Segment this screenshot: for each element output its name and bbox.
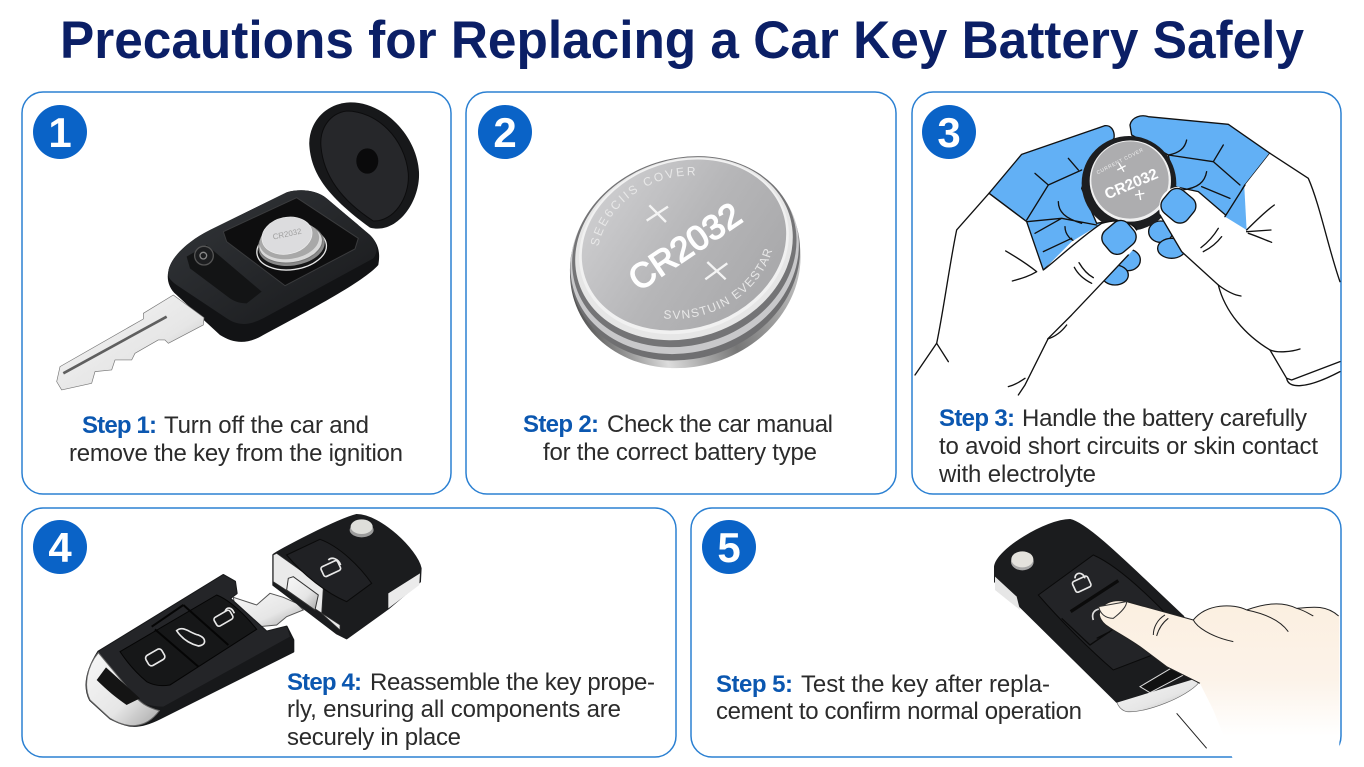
step 1 text bbox=[69, 412, 403, 467]
icon: CR2032 coin battery bbox=[570, 156, 801, 368]
step 5 text: cement to confirm normal operation bbox=[716, 698, 1082, 725]
step 1 number badge: 1 bbox=[48, 109, 72, 156]
step 5 text bbox=[716, 671, 1082, 725]
icon: CR2032 coin battery: SVNSTUIN EVESTAR bbox=[664, 249, 772, 319]
step 1 text: Turn off the car and bbox=[164, 412, 369, 439]
step 2 text: for the correct battery type bbox=[543, 439, 817, 466]
step 4 number badge bbox=[33, 520, 87, 574]
step 2 text: Check the car manual bbox=[607, 411, 833, 438]
step 3 number badge bbox=[922, 105, 976, 159]
step 5 text: Step 5: bbox=[716, 671, 793, 698]
step 3 text bbox=[938, 405, 1318, 488]
step 4 text bbox=[287, 669, 655, 751]
panel: step 3 bbox=[912, 92, 1341, 494]
icon: two gloved hands holding battery: CR2032 bbox=[1102, 166, 1161, 203]
step 4 text: rly, ensuring all components are bbox=[287, 696, 621, 723]
title: Precautions for Replacing a Car Key Battery Safely bbox=[60, 11, 1304, 70]
step 1 number badge bbox=[33, 105, 87, 159]
step 3 text: with electrolyte bbox=[938, 461, 1096, 488]
step 2 text bbox=[523, 411, 833, 466]
icon: two gloved hands holding battery bbox=[915, 116, 1340, 395]
step 3 text: Step 3: bbox=[939, 405, 1015, 432]
icon: two gloved hands holding battery: CURRENT COVER bbox=[1096, 147, 1145, 176]
icon: CR2032 coin battery: SEE6CIIS COVER bbox=[591, 167, 695, 246]
step 4 text: Step 4: bbox=[287, 669, 362, 696]
step 3 text: Handle the battery carefully bbox=[1022, 405, 1307, 432]
icon: CR2032 coin battery: CR2032 bbox=[622, 196, 749, 299]
step 1 text: Step 1: bbox=[82, 412, 157, 439]
step 2 number badge bbox=[478, 105, 532, 159]
icon: flip key being reassembled bbox=[87, 515, 421, 726]
panel: step 1 bbox=[22, 92, 451, 494]
panel: step 5 bbox=[691, 508, 1341, 760]
step 2 number badge: 2 bbox=[493, 109, 517, 156]
step 5 number badge: 5 bbox=[717, 524, 741, 571]
step 1 text: remove the key from the ignition bbox=[69, 440, 403, 467]
step 4 text: securely in place bbox=[287, 724, 461, 751]
icon: car key with open battery cover bbox=[57, 102, 419, 390]
step 3 text: to avoid short circuits or skin contact bbox=[939, 433, 1318, 460]
step 5 text: Test the key after repla- bbox=[801, 671, 1050, 698]
step 2 text: Step 2: bbox=[523, 411, 599, 438]
step 5 number badge bbox=[702, 520, 756, 574]
icon: car key with open battery cover: CR2032 bbox=[272, 227, 303, 242]
step 4 number badge: 4 bbox=[48, 524, 72, 571]
step 3 number badge: 3 bbox=[937, 109, 961, 156]
step 4 text: Reassemble the key prope- bbox=[370, 669, 655, 696]
panel: step 2 bbox=[465, 91, 897, 495]
icon: finger pressing key fob button bbox=[995, 520, 1339, 760]
panel: step 4 bbox=[22, 508, 676, 757]
